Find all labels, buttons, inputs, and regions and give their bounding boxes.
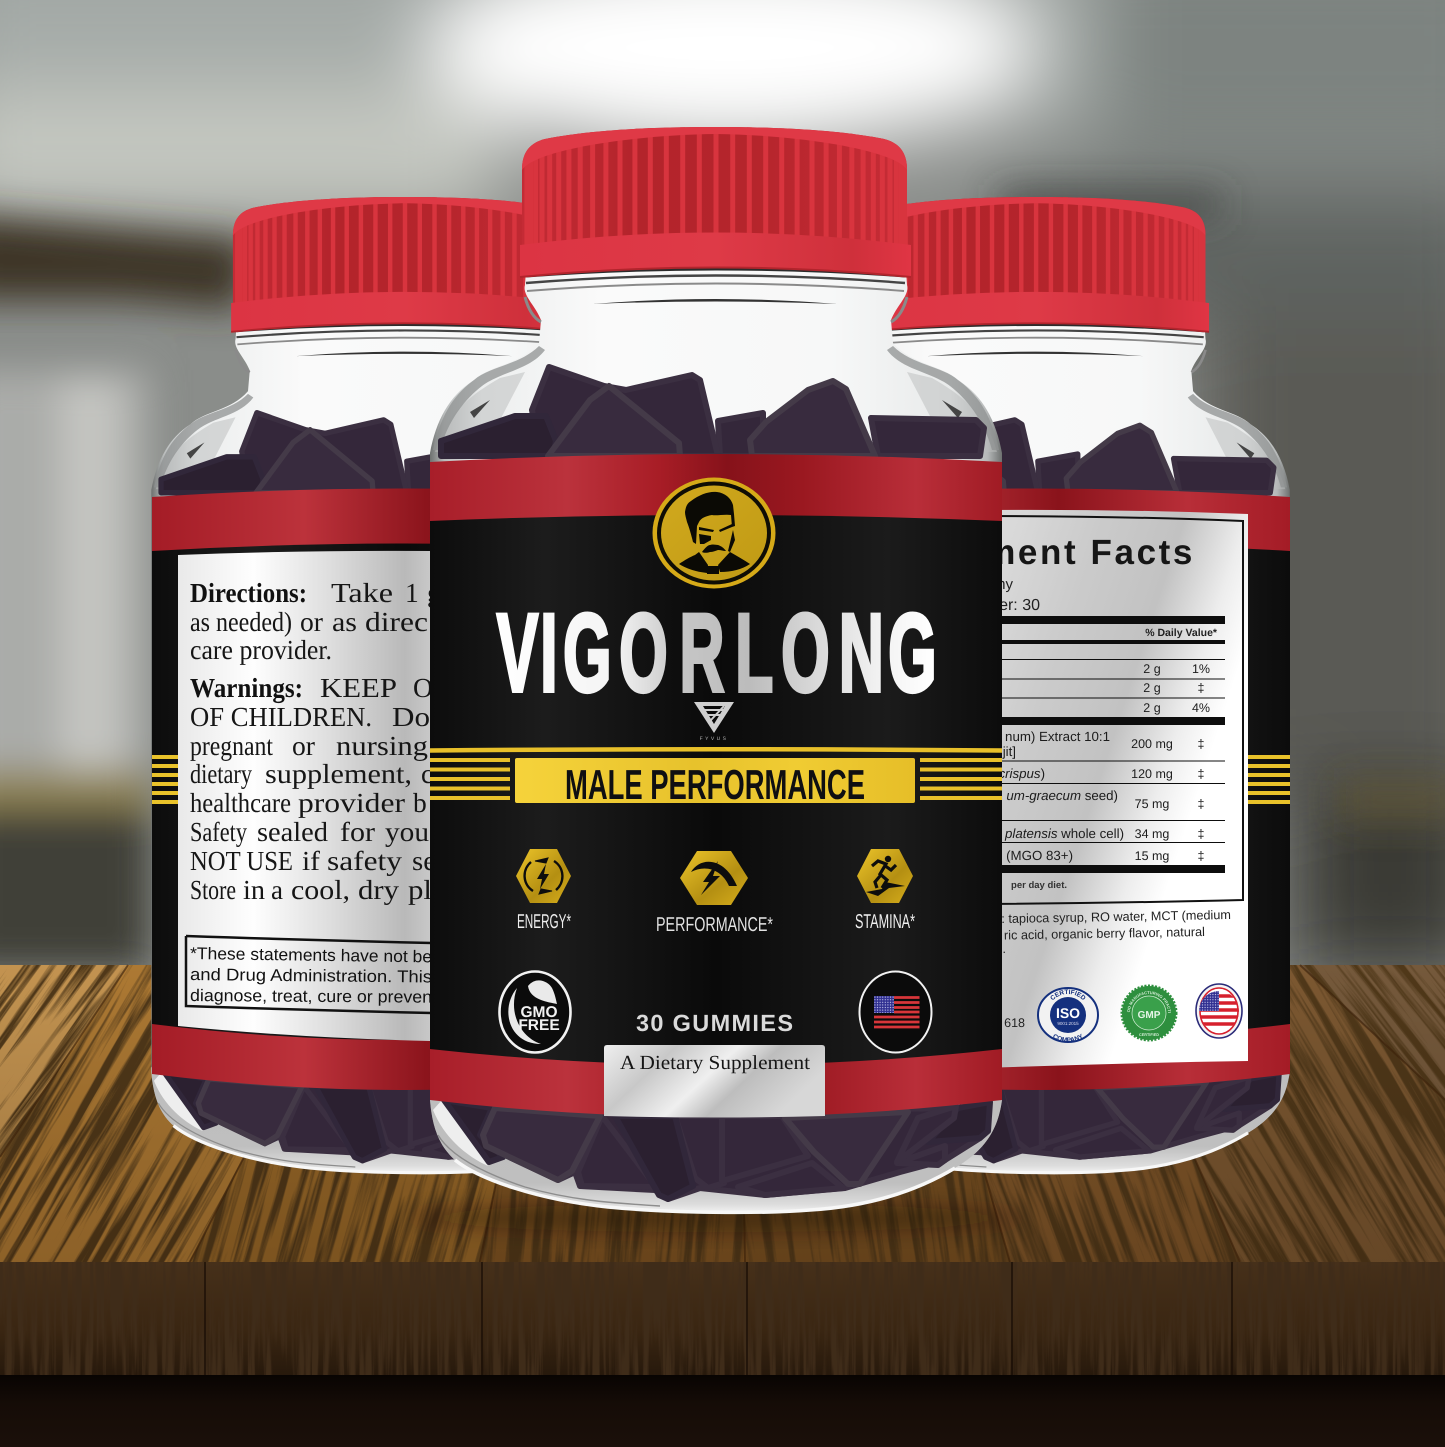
directions text: g (427, 577, 441, 608)
warnings text: or (292, 730, 315, 761)
black label panel (430, 515, 1002, 1065)
facts table text: ‡ (1198, 827, 1205, 841)
dietary supplement tab (604, 1045, 825, 1118)
facts table text: % Daily Value* (1145, 627, 1218, 639)
icon: FYVUS brand mark: FYVUS (700, 736, 728, 742)
left bottle: directions side (151, 191, 659, 1173)
warnings text: Safety (190, 816, 247, 847)
facts table text: 120 mg (1131, 767, 1173, 781)
facts table text: (MGO 83+) (1006, 848, 1073, 863)
facts panel border (985, 516, 1243, 904)
facts table text: ‡ (1198, 767, 1205, 781)
serving info: Servings Per Container: 30 (848, 597, 1040, 614)
center bottle: front (430, 120, 1002, 1212)
GMP badge (1120, 984, 1178, 1042)
gold mascot badge (652, 478, 776, 588)
FDA disclaimer box: and Drug Administration. This (190, 965, 432, 987)
background: blurred room (0, 0, 1445, 980)
GMP badge: GMP (1138, 1010, 1161, 1021)
heading: Supplement Facts: Supplement Facts (852, 533, 1195, 572)
warnings text: you (385, 816, 429, 847)
white facts panel (985, 510, 1248, 1068)
GMO free seal (500, 972, 570, 1052)
30 gummies count: 30 GUMMIES (636, 1010, 793, 1036)
warnings text: KEEP (320, 672, 397, 703)
facts table text: 75 mg (1135, 797, 1169, 811)
FDA disclaimer box: *These statements have not be (190, 944, 432, 966)
other ingredients text: : tapioca syrup, RO water, MCT (medium (1001, 908, 1231, 926)
GMO free seal: GMO (520, 1004, 558, 1021)
warnings text: sealed (257, 816, 328, 847)
ISO badge: CERTIFIED (1050, 989, 1086, 1000)
facts table text: jit] (1002, 744, 1016, 759)
ISO badge: COMPANY (1053, 1034, 1082, 1041)
red label band (430, 454, 1002, 1117)
warnings text: dry (358, 874, 399, 905)
facts table text: 34 mg (1135, 827, 1169, 841)
other ingredients text: 618 (1004, 1016, 1025, 1030)
benefit: performance: PERFORMANCE* (656, 914, 773, 936)
USA badge (1196, 984, 1242, 1038)
facts table text: num) Extract 10:1 (1005, 729, 1110, 744)
right bottle: supplement facts side (153, 197, 1290, 1174)
directions text: Take (331, 577, 393, 608)
facts table text: um-graecum seed) (1006, 788, 1118, 803)
directions text: 1 (405, 577, 419, 608)
title: VIGORLONG: VIGORLONG (497, 591, 937, 715)
directions text: direc (365, 606, 428, 637)
FDA disclaimer box (186, 936, 432, 1013)
serving info: Serving Size: 1 Gummy (855, 576, 1013, 593)
bottle glass and red cap (151, 191, 659, 1173)
FDA disclaimer box: diagnose, treat, cure or preven (190, 986, 432, 1007)
other ingredients text (1001, 908, 1231, 1030)
warnings text: se (412, 845, 436, 876)
warnings text: cool, (291, 874, 350, 905)
bottle glass and red cap (430, 120, 1002, 1212)
benefit: energy (516, 849, 571, 933)
benefit: energy: ENERGY* (517, 911, 571, 933)
benefit: stamina (855, 849, 915, 933)
warnings text: Store (190, 874, 236, 905)
warnings text: if (302, 845, 321, 876)
warnings text: pl (408, 874, 432, 905)
warnings text: healthcare (190, 787, 291, 818)
icon: FYVUS brand mark (694, 702, 734, 742)
warnings text: in (243, 874, 265, 905)
facts table text: 200 mg (1131, 737, 1173, 751)
gold stripes (430, 749, 1002, 750)
facts table text: 2 g (1143, 662, 1161, 676)
wooden table (0, 960, 1445, 1447)
facts table text: per day diet. (1011, 880, 1067, 891)
facts table rules (985, 616, 1225, 873)
bottle glass and red cap (782, 191, 1290, 1173)
directions text (190, 577, 441, 665)
warnings text: c (421, 758, 433, 789)
facts table text: 4% (1192, 701, 1210, 715)
facts table text: crispus) (998, 766, 1045, 781)
other ingredients text: . (1003, 942, 1006, 956)
plank seams (0, 965, 1445, 1262)
GMP badge: GOOD MANUFACTURING PRACTICE (1127, 991, 1171, 1013)
USA flag seal (860, 972, 932, 1052)
warnings text: b (413, 787, 427, 818)
warnings text: Do (392, 701, 430, 732)
GMO free seal: FREE (518, 1017, 560, 1034)
facts table text: ‡ (1198, 849, 1205, 863)
wood grain on planks (0, 960, 1445, 1270)
warnings text: NOT USE (190, 845, 293, 876)
warnings text (190, 672, 436, 905)
male performance banner (515, 758, 915, 808)
warnings text: pregnant (190, 730, 273, 761)
directions text: or (300, 606, 323, 637)
table underside (0, 1375, 1445, 1447)
warnings text: nursing (336, 730, 428, 761)
icon: man with moustache (679, 492, 750, 574)
ISO badge: ISO (1056, 1005, 1080, 1021)
directions text: Directions: (190, 577, 307, 608)
facts table text: platensis whole cell) (1004, 826, 1124, 841)
directions text: care provider. (190, 634, 332, 665)
facts table text: 2 g (1143, 681, 1161, 695)
directions text: as (332, 606, 357, 637)
warnings text: for (340, 816, 375, 847)
white directions panel (178, 551, 430, 1041)
label band (775, 488, 1290, 1090)
male performance banner: MALE PERFORMANCE (565, 761, 865, 808)
warnings text: safety (327, 845, 402, 876)
table top planks (0, 965, 1445, 1262)
facts table text: ‡ (1198, 737, 1205, 751)
warnings text: a (271, 874, 283, 905)
warnings text: supplement, (265, 758, 412, 789)
warnings text: O (413, 672, 433, 703)
label band (152, 488, 659, 1090)
facts table text: 1% (1192, 662, 1210, 676)
other ingredients text: ric acid, organic berry flavor, natural (1004, 925, 1205, 943)
warnings text: Warnings: (190, 672, 303, 704)
directions text: as needed) (190, 606, 292, 637)
benefit: stamina: STAMINA* (855, 911, 915, 933)
facts table text (998, 627, 1218, 891)
warnings text: dietary (190, 758, 252, 789)
facts table text: ‡ (1198, 797, 1205, 811)
ISO badge (1037, 987, 1099, 1043)
ISO badge: 9001:2015 (1057, 1021, 1079, 1026)
facts table text: 2 g (1143, 701, 1161, 715)
facts table text: 15 mg (1135, 849, 1169, 863)
warnings text: OF CHILDREN. (190, 701, 372, 732)
serving info (848, 576, 1040, 614)
dietary supplement tab: A Dietary Supplement (620, 1052, 810, 1074)
GMP badge: CERTIFIED (1139, 1033, 1159, 1037)
warnings text: provider (298, 787, 405, 818)
table front edge (0, 1262, 1445, 1375)
facts table text: ‡ (1198, 681, 1205, 695)
benefit: performance (656, 851, 773, 936)
